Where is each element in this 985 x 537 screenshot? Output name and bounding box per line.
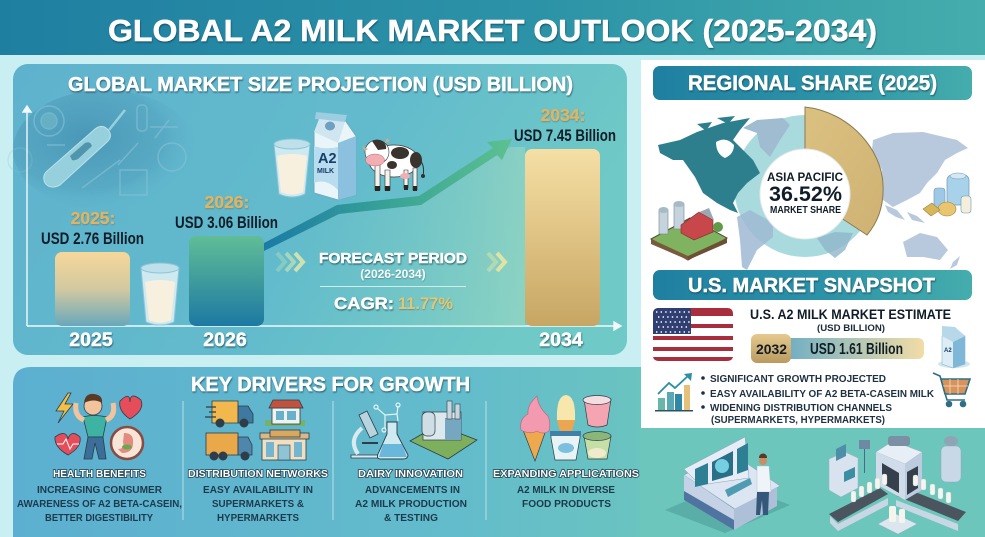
driver: expanding applications text: A2 MILK IN DIVERSE <box>517 484 615 496</box>
icon: A2 milk carton <box>314 112 356 200</box>
icon: cow <box>362 138 425 191</box>
label 2026 <box>175 192 278 232</box>
U.S. estimate text: U.S. A2 MILK MARKET ESTIMATE <box>750 307 951 322</box>
driver: distribution networks text <box>188 468 328 524</box>
icon: health benefits <box>55 393 143 459</box>
icon: dairy products <box>923 173 971 216</box>
drivers heading: KEY DRIVERS FOR GROWTH <box>191 373 470 396</box>
label 2034: USD 7.45 Billion <box>514 127 616 145</box>
label 2025 <box>41 208 144 248</box>
driver: dairy innovation text: DAIRY INNOVATION <box>358 468 463 480</box>
title banner: GLOBAL A2 MILK MARKET OUTLOOK (2025-2034) <box>108 13 877 48</box>
driver: dairy innovation text: ADVANCEMENTS IN <box>365 484 460 496</box>
driver: health benefits text: HEALTH BENEFITS <box>53 468 146 480</box>
forecast period: CAGR: <box>334 294 394 313</box>
bar 2034 <box>525 149 600 326</box>
icon: small carton: A2 <box>944 348 952 354</box>
panel: global market size projection <box>8 64 627 355</box>
bar 2025 <box>55 252 130 326</box>
icon: dairy innovation <box>351 401 477 459</box>
icon: A2 milk carton: A2 <box>318 151 337 167</box>
growth haze <box>264 147 525 326</box>
x axis labels: 2034 <box>539 329 583 351</box>
U.S. market snapshot header <box>653 270 972 300</box>
world map <box>658 115 968 270</box>
label 2026: 2026: <box>205 192 249 212</box>
driver: expanding applications text <box>493 468 639 510</box>
icon: US flag <box>653 308 733 361</box>
bottom right teal background <box>640 428 985 537</box>
driver: dairy innovation text: A2 MILK PRODUCTION <box>355 498 467 510</box>
U.S. estimate text <box>750 307 951 334</box>
driver: expanding applications text: EXPANDING APPLICATIONS <box>493 468 639 480</box>
regional share header: REGIONAL SHARE (2025) <box>688 72 937 95</box>
label 2034: 2034: <box>541 105 585 125</box>
driver: health benefits text: AWARENESS OF A2 BETA-CASEIN, <box>17 498 182 510</box>
title banner <box>0 0 985 55</box>
market share circle: 36.52% <box>769 183 842 206</box>
U.S. estimate text: (USD BILLION) <box>817 323 885 334</box>
driver: distribution networks text: HYPERMARKETS <box>217 512 299 524</box>
driver: distribution networks text: DISTRIBUTION NETWORKS <box>188 468 328 480</box>
decorative lab imagery <box>8 90 197 210</box>
growth arrow <box>264 139 512 251</box>
U.S. bullet list: EASY AVAILABILITY OF A2 BETA-CASEIN MILK <box>710 389 935 400</box>
U.S. bullet list: (SUPERMARKETS, HYPERMARKETS) <box>711 415 885 426</box>
forecast period: 11.77% <box>398 294 453 313</box>
icon: shopping cart <box>933 373 970 406</box>
panel: key drivers <box>13 367 700 537</box>
forecast period: (2026-2034) <box>360 267 426 281</box>
icon: growth chart <box>655 373 693 412</box>
icon: small carton <box>938 326 970 368</box>
driver: dairy innovation text: & TESTING <box>384 512 438 524</box>
regional share header <box>653 66 972 100</box>
panel: right column <box>641 60 985 428</box>
driver: health benefits text: BETTER DIGESTIBILITY <box>45 512 153 524</box>
U.S. market snapshot header: U.S. MARKET SNAPSHOT <box>688 275 935 297</box>
market share circle: ASIA PACIFIC <box>767 172 843 184</box>
icon: glass of milk small <box>141 263 179 325</box>
illustration: lab control console <box>665 437 790 533</box>
driver: health benefits text: INCREASING CONSUMER <box>37 484 162 496</box>
panel heading: GLOBAL MARKET SIZE PROJECTION (USD BILLION) <box>68 73 573 96</box>
x axis labels: 2026 <box>203 329 247 351</box>
label 2026: USD 3.06 Billion <box>175 214 278 232</box>
icon: A2 milk carton: MILK <box>317 168 334 175</box>
icon: expanding applications <box>521 395 611 461</box>
forecast period: FORECAST PERIOD <box>319 250 467 267</box>
driver: distribution networks text: EASY AVAILABILITY IN <box>203 484 313 496</box>
x axis labels: 2025 <box>69 329 113 351</box>
bar 2026 <box>189 236 264 326</box>
market share circle <box>760 149 850 239</box>
label 2025: 2025: <box>71 208 115 228</box>
dividers <box>183 401 486 520</box>
driver: distribution networks text: SUPERMARKETS & <box>212 498 304 510</box>
icon: glass of milk large <box>274 139 310 197</box>
driver: dairy innovation text <box>355 468 467 524</box>
asia pacific wedge <box>805 107 883 235</box>
illustration: bottling conveyor <box>829 436 966 534</box>
chart axes <box>23 106 621 330</box>
x axis labels <box>69 329 583 351</box>
driver: expanding applications text: FOOD PRODUCTS <box>522 498 611 510</box>
forecast period <box>277 250 505 313</box>
U.S. estimate pill <box>751 334 924 363</box>
U.S. bullet list: WIDENING DISTRIBUTION CHANNELS <box>710 403 892 414</box>
U.S. estimate pill: 2032 <box>756 341 787 357</box>
chevrons left <box>277 253 505 271</box>
icon: distribution networks <box>205 400 309 460</box>
driver: health benefits text <box>17 468 182 524</box>
icon: farm <box>651 201 727 260</box>
market share circle: MARKET SHARE <box>770 205 841 216</box>
U.S. bullet list <box>701 374 935 426</box>
U.S. bullet list: SIGNIFICANT GROWTH PROJECTED <box>710 374 886 385</box>
label 2025: USD 2.76 Billion <box>41 230 144 248</box>
label 2034 <box>514 105 616 145</box>
U.S. estimate pill: USD 1.61 Billion <box>810 341 903 358</box>
